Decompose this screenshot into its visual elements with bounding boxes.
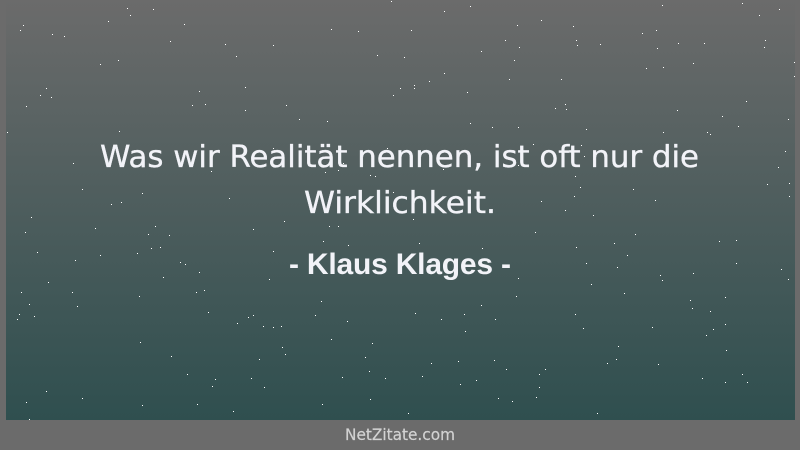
quote line 1: Was wir Realität nennen, ist oft nur die bbox=[100, 140, 699, 175]
author: - Klaus Klages - bbox=[289, 248, 511, 281]
quote line 2: Wirklichkeit. bbox=[304, 186, 496, 221]
footer site name: NetZitate.com bbox=[345, 425, 455, 444]
quote text bbox=[100, 140, 699, 221]
